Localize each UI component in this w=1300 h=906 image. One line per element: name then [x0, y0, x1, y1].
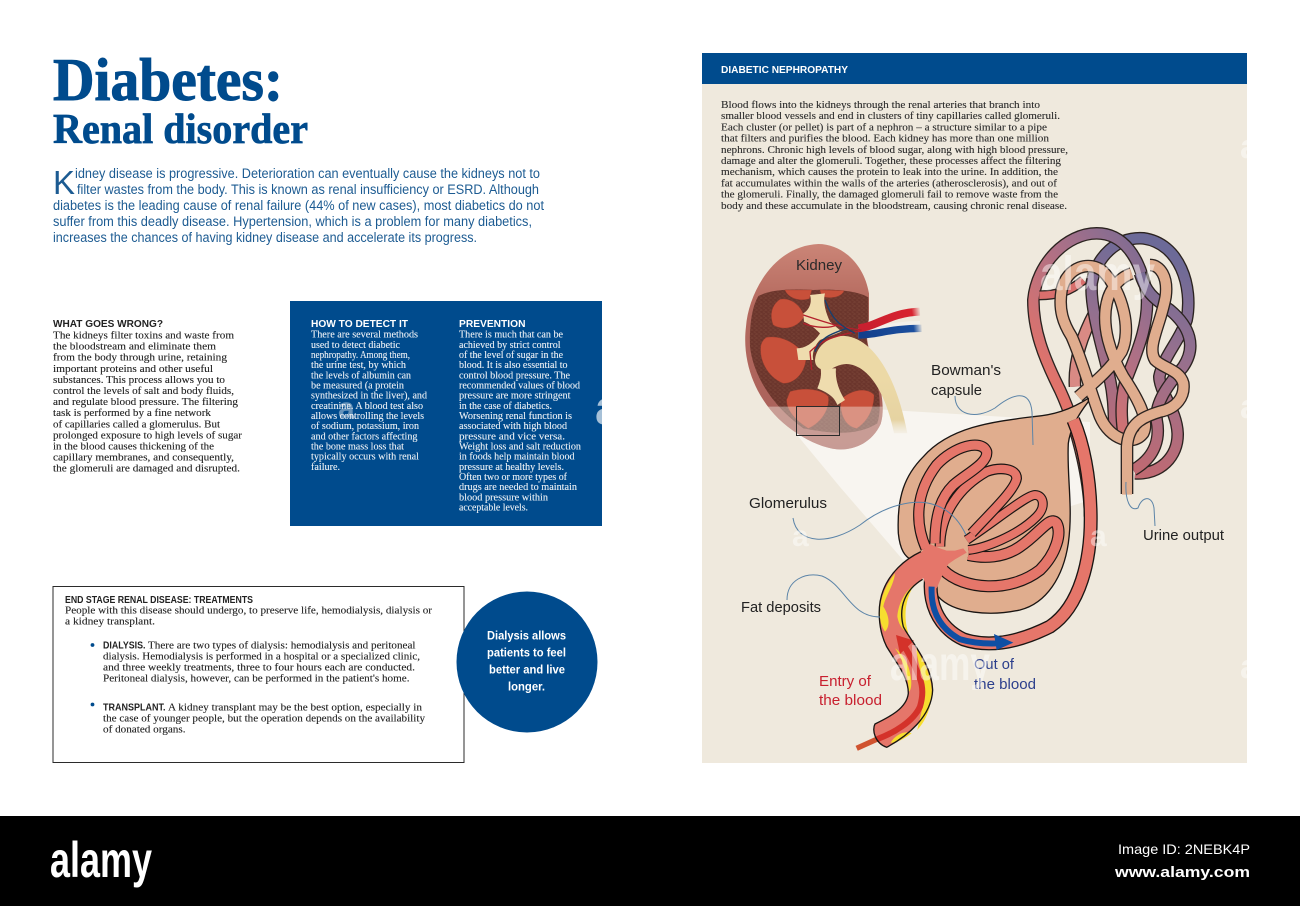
watermarks: a [792, 520, 809, 553]
text block: how to detect it: used to detect diabetic [311, 340, 400, 351]
bullet: transplant: TRANSPLANT. [103, 702, 166, 714]
text block: prevention: pressure and vice versa. [459, 431, 565, 442]
intro paragraph [53, 164, 544, 245]
intro paragraph: diabetes is the leading cause of renal failure (44% of new cases), most diabetics do not [53, 198, 544, 213]
callout circle: longer. [508, 680, 545, 694]
panel heading: DIABETIC NEPHROPATHY [721, 65, 848, 76]
bullet: dialysis [91, 640, 420, 684]
text block: how to detect it: and other factors affecting [311, 431, 418, 442]
text block: prevention: Often two or more types of [459, 472, 568, 483]
bullet: transplant: the case of younger people, but the operation depends on the availability [103, 712, 426, 724]
text block: how to detect it: of sodium, potassium, iron [311, 421, 420, 432]
magnifying beam [797, 407, 1090, 560]
text block: prevention: recommended values of blood [459, 380, 581, 392]
entry flow arrow [857, 739, 877, 748]
text block: how to detect it: HOW TO DETECT IT [311, 319, 409, 330]
text block: how to detect it: There are several methods [311, 330, 418, 341]
text block: prevention: in the case of diabetics. [459, 401, 552, 412]
bullet: transplant [91, 702, 426, 736]
text block: what goes wrong: and regulate blood pressure. The filtering [53, 396, 239, 408]
nephropathy description: fat accumulates within the walls of the arteries (atherosclerosis), and out of [721, 177, 1057, 189]
tube: lower left red [1075, 312, 1095, 387]
watermarks [338, 128, 1260, 691]
intro paragraph: idney disease is progressive. Deterioration can eventually cause the kidneys not to [75, 166, 540, 181]
nephropathy description: body and these accumulate in the bloodstream, causing chronic renal disease. [721, 200, 1067, 212]
text block: what goes wrong: prolonged exposure to high levels of sugar [53, 429, 242, 441]
text block: what goes wrong [53, 319, 242, 475]
illustration: kidney cross-section [745, 244, 922, 449]
panel: diabetic nephropathy [702, 53, 1247, 763]
text block: how to detect it [311, 319, 428, 473]
text block: prevention [459, 319, 582, 514]
text block: how to detect it: the bone mass loss that [311, 442, 404, 452]
ureter [815, 336, 907, 433]
lower calyx [817, 368, 845, 405]
text block: how to detect it: allows controlling the levels [311, 411, 424, 422]
bullet: dialysis: Peritoneal dialysis, however, can be performed in the patient's home. [103, 672, 409, 684]
treatments intro: People with this disease should undergo, to preserve life, hemodialysis, dialysis or [65, 604, 432, 616]
nephropathy description: nephrons. Chronic high levels of blood sugar, along with high blood pressure, [721, 144, 1068, 156]
renal vessels [803, 300, 922, 370]
illustration: bowman's capsule and glomerulus [857, 398, 1091, 748]
illustration: tubule cluster [1033, 233, 1190, 517]
callout line: urine output [1126, 482, 1155, 526]
panel: end stage renal disease treatments [53, 586, 464, 762]
text block: what goes wrong: from the body through urine, retaining [53, 352, 228, 364]
text block: how to detect it: be measured (a protein [311, 380, 405, 392]
title: Diabetes: [53, 47, 283, 113]
text block: prevention: PREVENTION [459, 319, 526, 330]
text block: what goes wrong: The kidneys filter toxins and waste from [53, 330, 235, 342]
tube: purple looping right [1092, 238, 1188, 473]
label: urine output: Urine output [1143, 528, 1224, 544]
text block: prevention: drugs are needed to maintain [459, 482, 578, 493]
watermarks: a [338, 392, 355, 425]
intro paragraph: K [53, 164, 75, 201]
callout circle [456, 592, 598, 732]
tube: main efferent vessel [1033, 233, 1147, 517]
blue outflow arrow [932, 587, 1013, 650]
tube: tan collecting duct [1127, 265, 1184, 494]
text block: prevention: associated with high blood [459, 421, 568, 432]
tube: tan convoluted one [1061, 266, 1145, 440]
text block: what goes wrong: substances. This process allows you to [53, 374, 225, 386]
heading: treatments: END STAGE RENAL DISEASE: TREATMENTS [65, 595, 253, 606]
selection box [796, 406, 840, 436]
label: entry of the blood [819, 674, 882, 709]
renal pelvis [797, 293, 842, 360]
label: bowman's capsule: capsule [931, 383, 982, 399]
entry arrowhead [896, 635, 914, 654]
text block: prevention: achieved by strict control [459, 340, 561, 351]
label: bowman's capsule [931, 363, 1001, 399]
tube: mauve right [1133, 273, 1190, 470]
text block: what goes wrong: capillary membranes, and consequently, [53, 452, 234, 464]
image id: Image ID: 2NEBK4P [1118, 841, 1250, 857]
watermarks: a [1240, 128, 1260, 166]
text block: prevention: blood pressure within [459, 492, 549, 503]
afferent arteriole tube [874, 552, 933, 747]
label: bowman's capsule: Bowman's [931, 363, 1001, 379]
text block: prevention: pressure at healthy levels. [459, 462, 564, 473]
tube: side connection [1039, 280, 1083, 295]
treatments intro: a kidney transplant. [65, 616, 155, 628]
watermarks: a [1090, 520, 1107, 553]
intro paragraph: filter wastes from the body. This is known as renal insufficiency or ESRD. Although [77, 182, 539, 197]
kidney lower wash [768, 406, 883, 450]
text block: prevention: control blood pressure. The [459, 370, 570, 381]
kidney label: Kidney [796, 258, 843, 274]
bullet: dialysis: dialysis. Hemodialysis is performed in a hospital or a specialized clinic, [103, 650, 420, 662]
intro paragraph: increases the chances of having kidney disease and accelerate its progress. [53, 230, 477, 245]
callout circle: patients to feel [487, 646, 566, 660]
bullet: transplant: A kidney transplant may be the best option, especially in [168, 702, 423, 714]
efferent arteriole [931, 420, 1091, 643]
intro paragraph: suffer from this deadly disease. Hypertension, which is a problem for many diabetics, [53, 214, 532, 229]
text block: what goes wrong: the bloodstream and eliminate them [53, 341, 217, 353]
glomerulus hub [907, 544, 967, 588]
text block: what goes wrong: in the blood causes thickening of the [53, 440, 214, 452]
bullet: dialysis: DIALYSIS. [103, 640, 146, 652]
callout line: fat deposits [787, 575, 880, 617]
watermarks: alamy [1040, 248, 1155, 301]
text block: what goes wrong: of capillaries called a glomerulus. But [53, 418, 220, 430]
nephropathy description: Each cluster (or pellet) is part of a nephron – a structure similar to a pipe [721, 121, 1047, 133]
label: out of the blood: Out of [974, 657, 1015, 673]
nephropathy description: that filters and purifies the blood. Each kidney has more than one million [721, 133, 1050, 145]
callout circle: Dialysis allows [487, 628, 566, 642]
text block: how to detect it: failure. [311, 462, 340, 473]
text block: prevention: acceptable levels. [459, 502, 528, 514]
watermarks: alamy [890, 638, 990, 691]
callout line: glomerulus [793, 502, 966, 539]
label: glomerulus: Glomerulus [749, 496, 827, 512]
title: Renal disorder [53, 107, 308, 153]
capsule body [898, 398, 1088, 613]
text block: prevention: There is much that can be [459, 330, 563, 341]
bullet: dialysis: There are two types of dialysis: hemodialysis and peritoneal [148, 640, 416, 652]
text block: what goes wrong: control the levels of salt and body fluids, [53, 385, 234, 397]
website: www.alamy.com [1114, 864, 1250, 881]
text block: what goes wrong: task is performed by a fine network [53, 407, 212, 419]
text block: how to detect it: the levels of albumin can [311, 370, 412, 381]
text block: prevention: of the level of sugar in the [459, 350, 563, 361]
nephropathy description: the glomeruli. Finally, the damaged glomeruli fail to remove waste from the [721, 189, 1058, 201]
text block: what goes wrong: the glomeruli are damaged and disrupted. [53, 463, 240, 475]
alamy logo: alamy [50, 832, 152, 888]
afferent outline [874, 552, 933, 747]
footer bar [0, 816, 1300, 906]
label: entry of the blood: the blood [819, 693, 882, 709]
renal pyramids [761, 290, 874, 428]
nephropathy description [721, 99, 1068, 212]
treatments intro [65, 604, 432, 628]
text block: how to detect it: the urine test, by which [311, 360, 407, 371]
nephropathy description: smaller blood vessels and end in clusters of tiny capillaries called glomeruli. [721, 110, 1060, 122]
text block: prevention: Weight loss and salt reduction [459, 442, 582, 452]
label: out of the blood [974, 657, 1036, 693]
watermarks: a [1240, 648, 1260, 686]
label: out of the blood: the blood [974, 677, 1036, 693]
nephropathy description: Blood flows into the kidneys through the renal arteries that branch into [721, 99, 1040, 111]
watermarks: a [1240, 388, 1260, 426]
callout line: bowman's capsule [955, 396, 1033, 445]
inner red flow [877, 645, 922, 739]
callout circle: better and live [489, 662, 565, 676]
nephropathy description: mechanism, which causes the protein to leak into the urine. In addition, the [721, 166, 1058, 178]
text block: prevention: in foods help maintain blood [459, 452, 575, 463]
text block: how to detect it: typically occurs with renal [311, 452, 419, 463]
text block: prevention: pressure are more stringent [459, 391, 571, 402]
text block: prevention: blood. It is also essential to [459, 360, 568, 371]
title [53, 47, 308, 153]
text block: what goes wrong: WHAT GOES WRONG? [53, 319, 163, 330]
label: entry of the blood: Entry of [819, 674, 872, 690]
bullet: transplant: of donated organs. [103, 724, 186, 736]
nephropathy description: damage and alter the glomeruli. Together, these processes affect the filtering [721, 155, 1062, 167]
text block: how to detect it: synthesized in the liver), and [311, 391, 428, 402]
label: fat deposits: Fat deposits [741, 600, 821, 616]
fat deposits [879, 573, 932, 743]
text block: how to detect it: nephropathy. Among them, [311, 350, 410, 361]
bullet: dialysis: and three weekly treatments, three to four hours each are conducted. [103, 662, 415, 674]
watermarks: a [595, 382, 622, 435]
text block: what goes wrong: important proteins and other useful [53, 363, 213, 375]
panel: how to detect it and prevention [290, 301, 602, 526]
text block: how to detect it: creatinine. A blood test also [311, 401, 423, 412]
text block: prevention: Worsening renal function is [459, 411, 572, 422]
glomerulus capillary loops [919, 445, 1058, 586]
